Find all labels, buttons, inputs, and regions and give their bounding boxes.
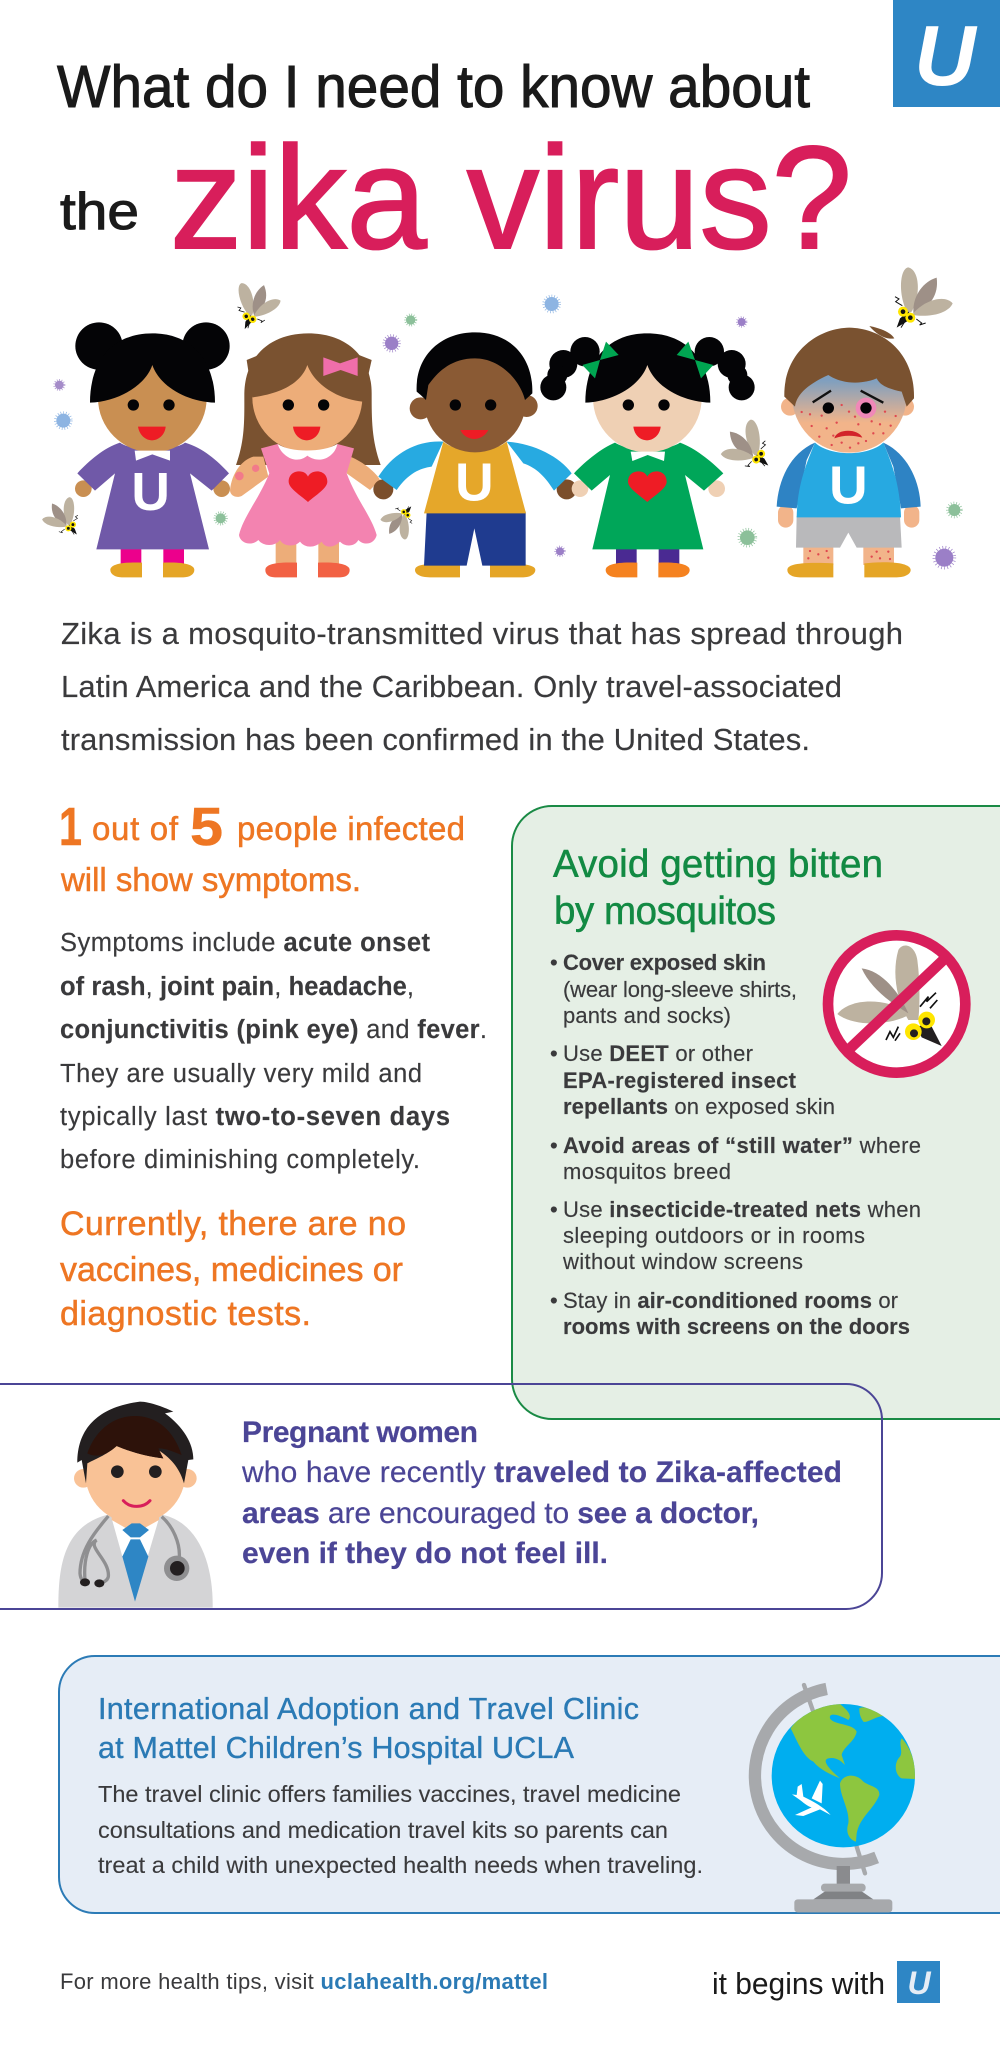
girl in purple dress <box>75 322 230 577</box>
symptoms text: of rash, joint pain, headache, <box>60 973 414 1001</box>
pregnant women text <box>241 1416 842 1570</box>
right half of illustration <box>540 267 961 577</box>
girl in purple dress: U <box>131 463 170 522</box>
symptoms text <box>60 929 487 1174</box>
symptoms heading: out of <box>92 810 179 847</box>
intro paragraph <box>61 616 903 757</box>
bullet list: • <box>550 1133 558 1158</box>
bullet list: sleeping outdoors or in rooms <box>563 1223 865 1248</box>
girl in green dress <box>540 333 755 577</box>
title <box>57 54 852 279</box>
panel: avoid mosquito bites <box>512 806 1000 1419</box>
pregnant women text: even if they do not feel ill. <box>242 1537 608 1570</box>
bullet list: repellants on exposed skin <box>563 1094 835 1119</box>
clinic text <box>98 1781 703 1878</box>
bullet list: pants and socks) <box>563 1003 731 1028</box>
girl in pink dress <box>230 333 381 577</box>
panel heading: by mosquitos <box>554 890 776 933</box>
bullet list: Cover exposed skin <box>563 950 766 975</box>
pregnant women text: who have recently traveled to Zika-affected <box>241 1456 842 1489</box>
boy in yellow shirt <box>373 332 577 577</box>
mosquitos right <box>716 267 953 473</box>
bullet list: without window screens <box>562 1249 803 1274</box>
symptoms text: They are usually very mild and <box>60 1060 422 1088</box>
clinic heading: International Adoption and Travel Clinic <box>98 1692 639 1726</box>
bullet list: • <box>550 1041 558 1066</box>
footer logo: it begins with <box>712 1966 885 2001</box>
sick boy with rash: U <box>829 456 868 515</box>
panel heading: Avoid getting bitten <box>553 843 883 886</box>
boy in yellow shirt: U <box>455 454 494 513</box>
bullet list: (wear long-sleeve shirts, <box>563 977 797 1002</box>
bullet list: mosquitos breed <box>563 1159 731 1184</box>
symptoms heading <box>59 797 465 898</box>
footer logo <box>712 1961 940 2003</box>
bullet list: • <box>550 950 558 975</box>
no vaccines callout: diagnostic tests. <box>60 1295 311 1333</box>
symptoms heading: 1 <box>59 797 82 857</box>
sick boy with rash <box>777 326 921 577</box>
symptoms heading: will show symptoms. <box>60 861 361 898</box>
panel: pregnant women <box>0 1384 882 1609</box>
clinic heading <box>98 1692 639 1765</box>
intro paragraph: Latin America and the Caribbean. Only travel-associated <box>61 669 842 704</box>
logo: U badge: U <box>914 9 978 104</box>
panel: travel clinic <box>59 1656 1000 1913</box>
logo: U badge <box>893 0 1000 107</box>
left half of illustration <box>42 275 577 577</box>
title: the <box>60 183 139 241</box>
icon: globe with plane <box>755 1685 915 1912</box>
bullet list: • <box>550 1288 558 1313</box>
symptoms text: before diminishing completely. <box>60 1146 420 1174</box>
intro paragraph: transmission has been confirmed in the United States. <box>61 722 810 757</box>
panel heading <box>553 843 883 933</box>
pregnant women text: areas are encouraged to see a doctor, <box>242 1497 759 1530</box>
clinic text: The travel clinic offers families vaccines, travel medicine <box>98 1781 681 1807</box>
symptoms text: typically last two-to-seven days <box>60 1103 450 1131</box>
symptoms text: conjunctivitis (pink eye) and fever. <box>60 1016 487 1044</box>
no vaccines callout: vaccines, medicines or <box>60 1251 403 1289</box>
icon: doctor <box>58 1402 213 1608</box>
bullet list: • <box>550 1197 558 1222</box>
symptoms heading: people infected <box>237 810 465 847</box>
pregnant women text: Pregnant women <box>242 1416 478 1449</box>
title: zika virus? <box>170 116 852 279</box>
symptoms heading: 5 <box>190 797 223 857</box>
mosquitos left <box>42 275 412 540</box>
bullet list <box>550 950 921 1339</box>
bullet list: EPA-registered insect <box>563 1068 797 1093</box>
bullet list: Use DEET or other <box>563 1041 753 1066</box>
no vaccines callout <box>60 1205 406 1333</box>
bullet list: Use insecticide-treated nets when <box>563 1197 921 1222</box>
symptoms text: Symptoms include acute onset <box>60 929 430 957</box>
viruses left <box>54 315 416 524</box>
no vaccines callout: Currently, there are no <box>60 1205 406 1243</box>
illustration: children, mosquitos and viruses <box>42 267 961 577</box>
footer logo: U <box>907 1965 931 2001</box>
clinic heading: at Mattel Children’s Hospital UCLA <box>98 1731 575 1765</box>
icon: no mosquito <box>828 935 965 1073</box>
bullet list: Avoid areas of “still water” where <box>563 1133 921 1158</box>
title: What do I need to know about <box>57 54 810 120</box>
intro paragraph: Zika is a mosquito-transmitted virus that has spread through <box>61 616 903 651</box>
footer link: For more health tips, visit uclahealth.org/mattel <box>60 1969 548 1994</box>
viruses right <box>544 296 961 568</box>
bullet list: rooms with screens on the doors <box>563 1314 910 1339</box>
bullet list: Stay in air-conditioned rooms or <box>563 1288 898 1313</box>
clinic text: treat a child with unexpected health needs when traveling. <box>98 1852 703 1878</box>
clinic text: consultations and medication travel kits so parents can <box>98 1817 668 1843</box>
